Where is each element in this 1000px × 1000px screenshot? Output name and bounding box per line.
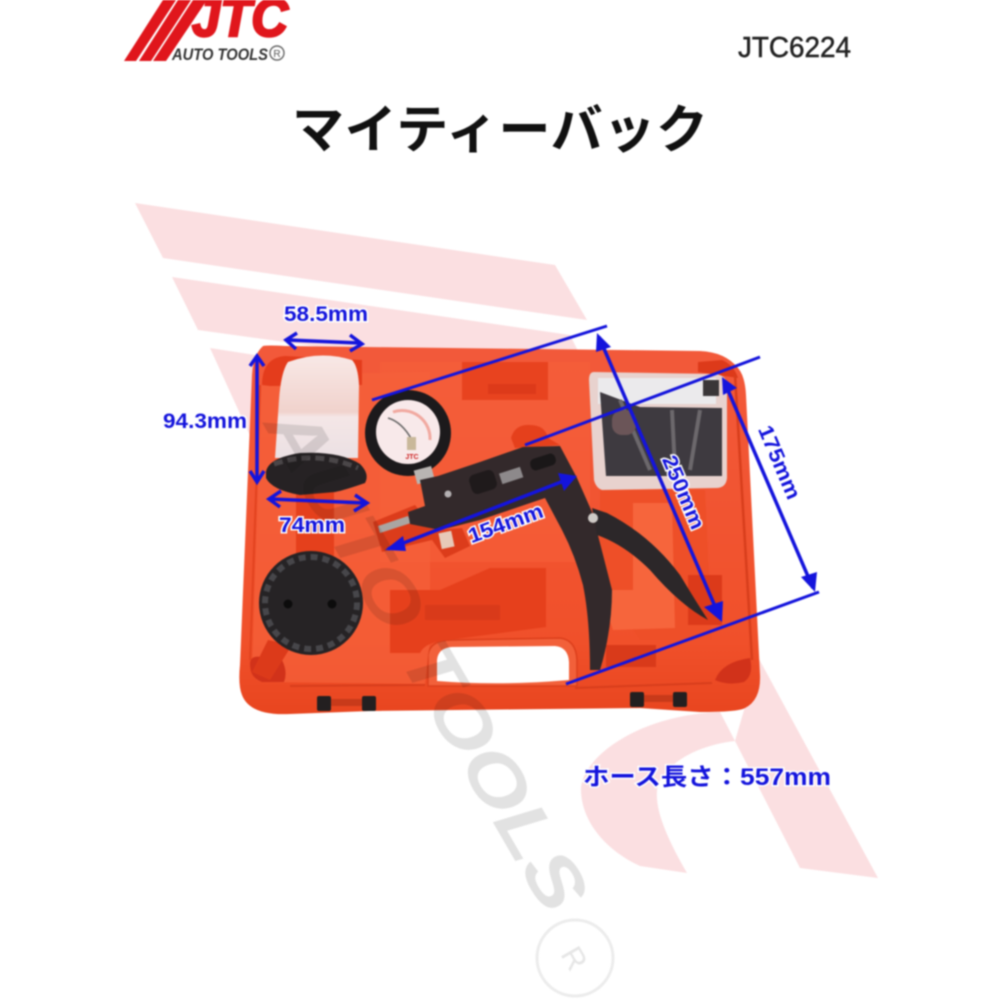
rail right [735,375,752,660]
corner recess bottom right [715,658,751,684]
handle rim [428,638,577,686]
arrowheads 154mm [385,473,577,551]
pump nozzle [378,516,411,533]
vacuum pump [378,446,708,670]
body logo [499,467,523,484]
cavity under bottle [296,492,334,556]
bottle cap [266,453,367,495]
watermark registered mark: R [554,941,593,976]
dimension lines [372,326,819,684]
body collar [468,468,498,496]
pump body and grip [408,446,612,670]
case shell [239,346,760,714]
dimension arrow: 58.5mm [286,333,362,351]
model number: JTC6224 [738,32,851,64]
dimension arrow: 250mm [599,337,720,618]
label: 58.5mm: 58.5mm [284,303,368,326]
vacuum gauge [365,390,451,476]
watermark: pink logo stripes [135,203,878,878]
carrying case [239,346,760,714]
arrowheads 175mm [722,377,817,592]
label: 74mm: 74mm [279,514,345,537]
label: 154mm: 154mm [465,500,546,548]
pivot pin [588,513,598,523]
handle opening [437,646,569,683]
latch right [630,692,687,707]
rail left [250,385,260,660]
label: hose length: ホース長さ：557mm [583,764,831,791]
label: 175mm: 175mm [753,422,805,503]
pump lever [592,508,708,620]
vacuum gauge: JTC [405,454,419,461]
dark recess right [688,575,722,625]
tray inner panel left [252,372,430,684]
label: 94.3mm: 94.3mm [163,410,247,433]
dimension arrow: 154mm [388,477,574,549]
pump fitting [438,531,455,549]
body detail [529,452,557,472]
cavity right [600,490,712,640]
label: 250mm: 250mm [657,452,709,533]
slot bottom right [606,645,656,667]
dimension arrow: 175mm [724,381,813,588]
registered mark [270,46,284,60]
watermark: tinted overlay with wordmark [248,390,613,996]
recess round finger notch [511,425,560,448]
watermark wordmark: AUTO TOOLS [248,390,603,926]
black disc lid [259,551,363,655]
logo stripes [124,0,207,61]
logo: JTC Auto Tools [124,0,289,64]
corner recess top right [698,360,738,378]
screw [444,490,452,498]
recess around nozzle [373,505,470,558]
watermark registered mark [537,920,613,996]
small parts case [589,372,727,490]
rail bottom [290,683,712,688]
registered mark: R [273,49,281,60]
corner recess top left [262,356,362,386]
title: マイティーバック [292,88,708,163]
cavity below disc [252,640,292,680]
latch left [317,696,376,711]
dimension arrow: 74mm [269,491,367,511]
fluid reservoir bottle [275,355,359,458]
raised block right [600,503,675,630]
corner recess bottom left [250,657,286,682]
arrowheads 250mm [596,333,723,622]
recess lower centre [390,568,546,653]
tray inner panel centre [380,362,590,562]
recess top centre [462,362,548,400]
logo wordmark: AUTO TOOLS [171,45,269,64]
dimension arrow: 94.3mm [250,356,264,482]
gauge stem [414,466,435,484]
